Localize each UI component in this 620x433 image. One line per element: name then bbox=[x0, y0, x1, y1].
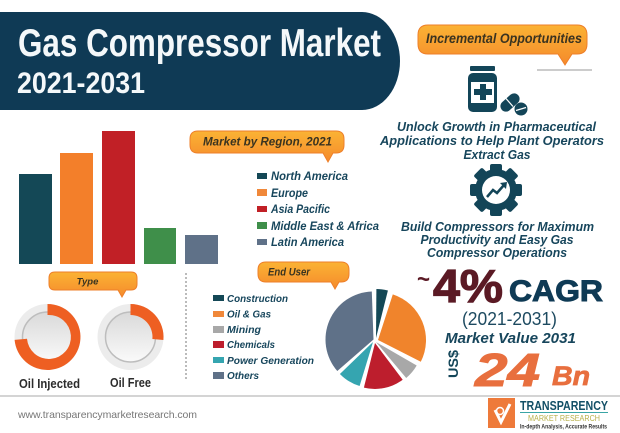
title: Gas Compressor Market bbox=[18, 22, 381, 65]
legend: end user: Oil & Gas bbox=[227, 308, 271, 320]
label: oil free: Oil Free bbox=[110, 376, 151, 390]
legend: regions: Latin America bbox=[271, 235, 344, 249]
callout: incremental opportunities: Incremental Opportunities bbox=[426, 30, 582, 46]
callout: type: Type bbox=[77, 276, 99, 288]
legend: end user bbox=[213, 293, 314, 382]
title years: 2021-2031 bbox=[17, 67, 145, 100]
legend: end user: Others bbox=[227, 370, 259, 382]
icon: gear with growth arrow bbox=[470, 164, 522, 216]
bar chart: market by region bbox=[19, 131, 218, 264]
callout: end user bbox=[258, 262, 349, 289]
donut: oil free bbox=[98, 304, 164, 390]
legend: regions bbox=[257, 169, 379, 249]
legend: end user: Construction bbox=[227, 293, 288, 305]
logo: transparency market research bbox=[488, 398, 609, 430]
CAGR figure: ~ bbox=[417, 266, 430, 293]
legend: end user: Chemicals bbox=[227, 339, 275, 351]
callout: incremental opportunities bbox=[418, 25, 592, 70]
CAGR figure: CAGR bbox=[509, 275, 603, 308]
text: compressor opportunity: Productivity and Easy Gas bbox=[420, 233, 574, 247]
CAGR figure bbox=[417, 260, 603, 312]
CAGR period: (2021-2031) bbox=[462, 309, 557, 329]
legend: end user: Power Generation bbox=[227, 355, 314, 367]
market value figure: Bn bbox=[552, 361, 590, 391]
market value figure bbox=[445, 344, 590, 396]
callout: market by region bbox=[190, 131, 344, 162]
text: pharmaceutical opportunity bbox=[379, 120, 604, 162]
label: oil injected: Oil Injected bbox=[19, 377, 80, 391]
website url: www.transparencymarketresearch.com bbox=[17, 409, 197, 421]
market value figure: US$ bbox=[445, 350, 461, 378]
logo: transparency market research: MARKET RESEARCH bbox=[528, 414, 600, 423]
callout: end user: End User bbox=[268, 266, 311, 278]
callout: type bbox=[49, 272, 137, 297]
legend: end user: Mining bbox=[227, 324, 262, 336]
legend: regions: North America bbox=[271, 169, 348, 183]
market value figure: 24 bbox=[474, 344, 540, 396]
text: pharmaceutical opportunity: Applications to Help Plant Operators bbox=[379, 134, 604, 148]
text: compressor opportunity: Build Compressors for Maximum bbox=[401, 220, 594, 234]
legend: regions: Middle East & Africa bbox=[271, 219, 379, 233]
text: pharmaceutical opportunity: Extract Gas bbox=[464, 148, 531, 162]
logo: transparency market research: In-depth Analysis, Accurate Results bbox=[520, 424, 608, 430]
donut: oil injected bbox=[14, 304, 80, 391]
text: compressor opportunity: Compressor Operations bbox=[427, 246, 567, 260]
pie chart: end user bbox=[325, 289, 426, 389]
market value label: Market Value 2031 bbox=[445, 330, 576, 347]
legend: regions: Asia Pacific bbox=[270, 202, 330, 216]
legend: regions: Europe bbox=[271, 186, 308, 200]
CAGR figure: 4% bbox=[433, 260, 503, 312]
icon: medicine bottle and pills bbox=[468, 66, 528, 116]
callout: market by region: Market by Region, 2021 bbox=[203, 136, 332, 148]
text: pharmaceutical opportunity: Unlock Growth in Pharmaceutical bbox=[397, 120, 597, 134]
title banner bbox=[0, 12, 400, 110]
text: compressor opportunity bbox=[401, 220, 594, 260]
